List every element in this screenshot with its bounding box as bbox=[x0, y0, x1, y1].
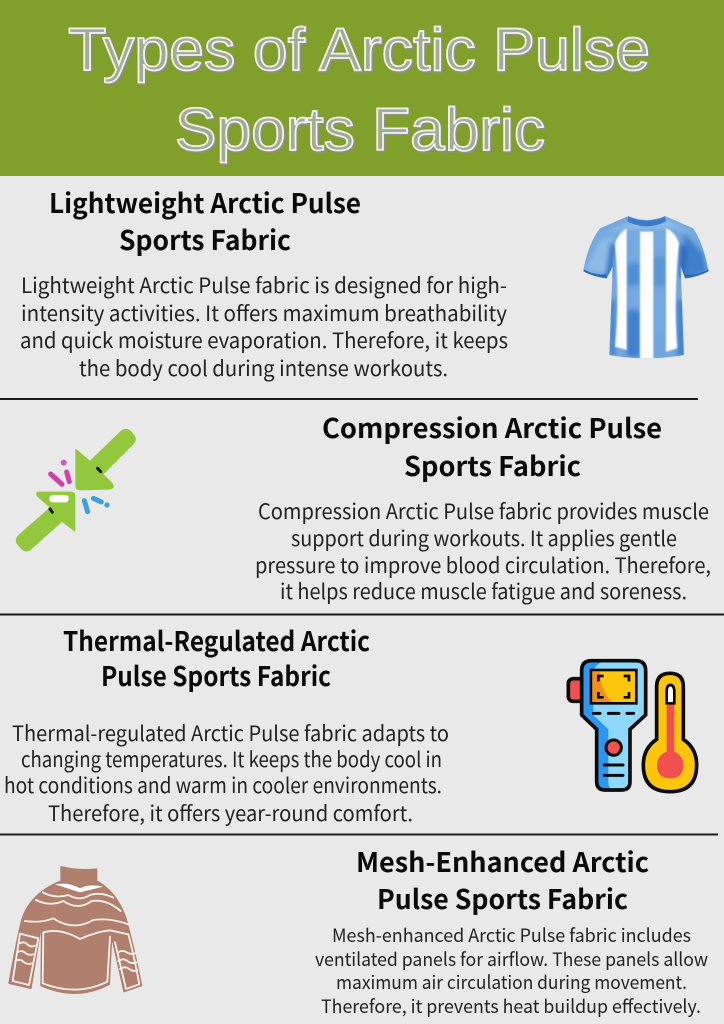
section 1 heading: Lightweight Arctic Pulse bbox=[49, 182, 361, 221]
icon: thermal scanner and thermometer bbox=[568, 661, 697, 792]
title banner bbox=[0, 0, 724, 176]
section 3 heading: Pulse Sports Fabric bbox=[101, 655, 331, 694]
section 2 text bbox=[255, 496, 711, 606]
title banner: Sports Fabric bbox=[175, 96, 545, 163]
section 4 heading: Pulse Sports Fabric bbox=[377, 878, 628, 917]
section 4 text: Therefore, it prevents heat buildup effectively. bbox=[321, 993, 701, 1019]
section 3 text bbox=[4, 718, 449, 828]
section 4 text: Mesh-enhanced Arctic Pulse fabric includes bbox=[332, 922, 691, 948]
section 2 text: pressure to improve blood circulation. Therefore, bbox=[255, 550, 711, 580]
section 1 text: and quick moisture evaporation. Therefore, it keeps bbox=[20, 325, 508, 355]
divider bbox=[0, 614, 724, 616]
section 2 text: Compression Arctic Pulse fabric provides muscle bbox=[258, 496, 709, 526]
section 3 text: hot conditions and warm in cooler environments. bbox=[4, 770, 442, 800]
section 4 heading: Mesh-Enhanced Arctic bbox=[356, 841, 649, 880]
section 2 text: support during workouts. It applies gentle bbox=[291, 523, 677, 553]
section 3 text: changing temperatures. It keeps the body cool in bbox=[21, 744, 442, 774]
section 2 heading: Compression Arctic Pulse bbox=[322, 407, 662, 446]
section 3 text: Thermal-regulated Arctic Pulse fabric adapts to bbox=[12, 718, 449, 748]
title banner: Types of Arctic Pulse bbox=[69, 18, 651, 85]
icon: brown sweater bbox=[9, 867, 142, 993]
section 1 heading bbox=[49, 182, 361, 258]
section 4 text: maximum air circulation during movement. bbox=[336, 969, 687, 995]
thermometer bbox=[643, 673, 697, 792]
section 3 heading bbox=[63, 620, 370, 694]
section 1 text: Lightweight Arctic Pulse fabric is designed for high- bbox=[21, 270, 507, 300]
section 4 heading bbox=[356, 841, 649, 917]
section 3 heading: Thermal-Regulated Arctic bbox=[63, 620, 370, 659]
divider bbox=[0, 834, 718, 836]
scanner body bbox=[582, 661, 646, 790]
section 2 heading: Sports Fabric bbox=[404, 445, 581, 484]
section 3 text: Therefore, it offers year-round comfort. bbox=[48, 798, 413, 828]
section 1 text: the body cool during intense workouts. bbox=[79, 353, 448, 383]
section 1 text bbox=[20, 270, 508, 383]
icon: blue striped shirt bbox=[583, 216, 709, 358]
trigger bbox=[568, 679, 585, 701]
icon: compression arrows bbox=[16, 429, 135, 551]
section 4 text bbox=[315, 922, 708, 1019]
section 2 heading bbox=[322, 407, 662, 484]
section 1 heading: Sports Fabric bbox=[119, 219, 291, 258]
title banner: Types of Arctic Pulse bbox=[68, 16, 650, 83]
divider bbox=[0, 398, 698, 400]
section 1 text: intensity activities. It offers maximum breathability bbox=[21, 298, 507, 328]
section 4 text: ventilated panels for airflow. These panels allow bbox=[315, 946, 708, 972]
title banner: Sports Fabric bbox=[176, 98, 546, 165]
section 2 text: it helps reduce muscle fatigue and soreness. bbox=[280, 576, 687, 606]
